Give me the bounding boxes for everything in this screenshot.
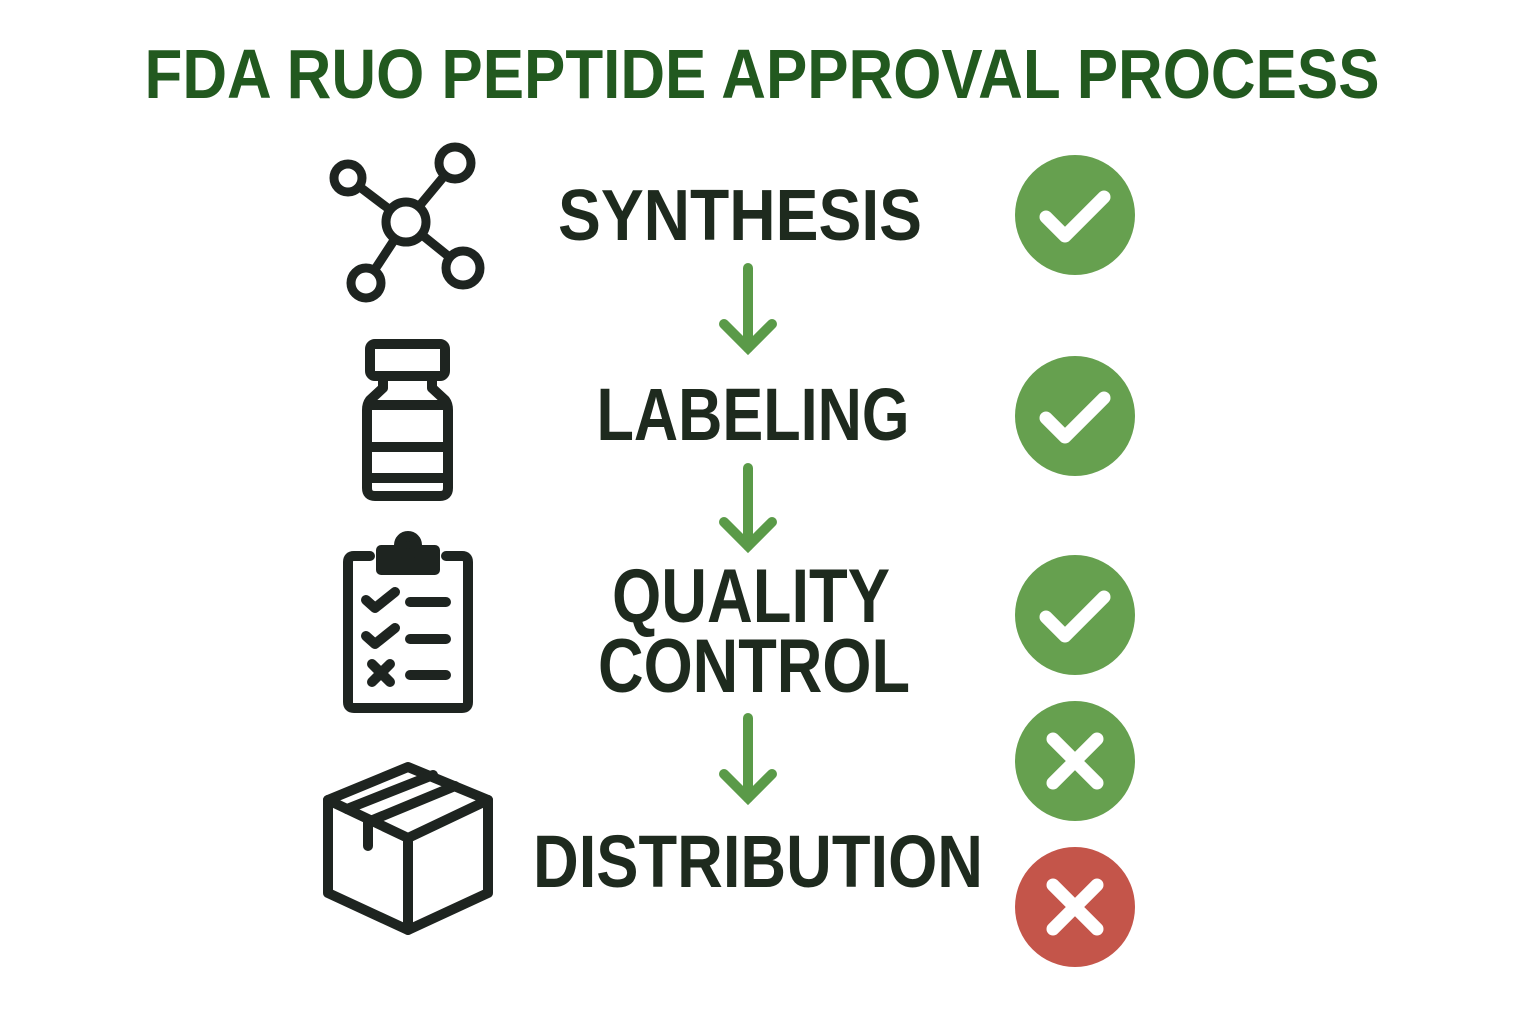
status: check 1: [1015, 155, 1135, 275]
title: FDA RUO PEPTIDE APPROVAL PROCESS: [144, 35, 1380, 113]
icon: molecule: [334, 147, 480, 298]
step: labeling: LABELING: [596, 373, 910, 456]
arrow 2: [724, 468, 772, 546]
icon: box: [328, 767, 488, 930]
icon: bottle: [367, 344, 448, 496]
status: check 3: [1015, 555, 1135, 675]
step: quality control: CONTROL: [598, 624, 910, 709]
step: quality control: QUALITY: [612, 554, 890, 639]
status: check 2: [1015, 356, 1135, 476]
status: red cross: [1015, 847, 1135, 967]
arrow 1: [724, 268, 772, 348]
icon: clipboard: [348, 536, 468, 708]
status: green cross: [1015, 701, 1135, 821]
arrow 3: [724, 718, 772, 798]
step: distribution: DISTRIBUTION: [533, 820, 983, 903]
step: synthesis: SYNTHESIS: [558, 176, 922, 256]
step: quality control: [598, 554, 910, 709]
